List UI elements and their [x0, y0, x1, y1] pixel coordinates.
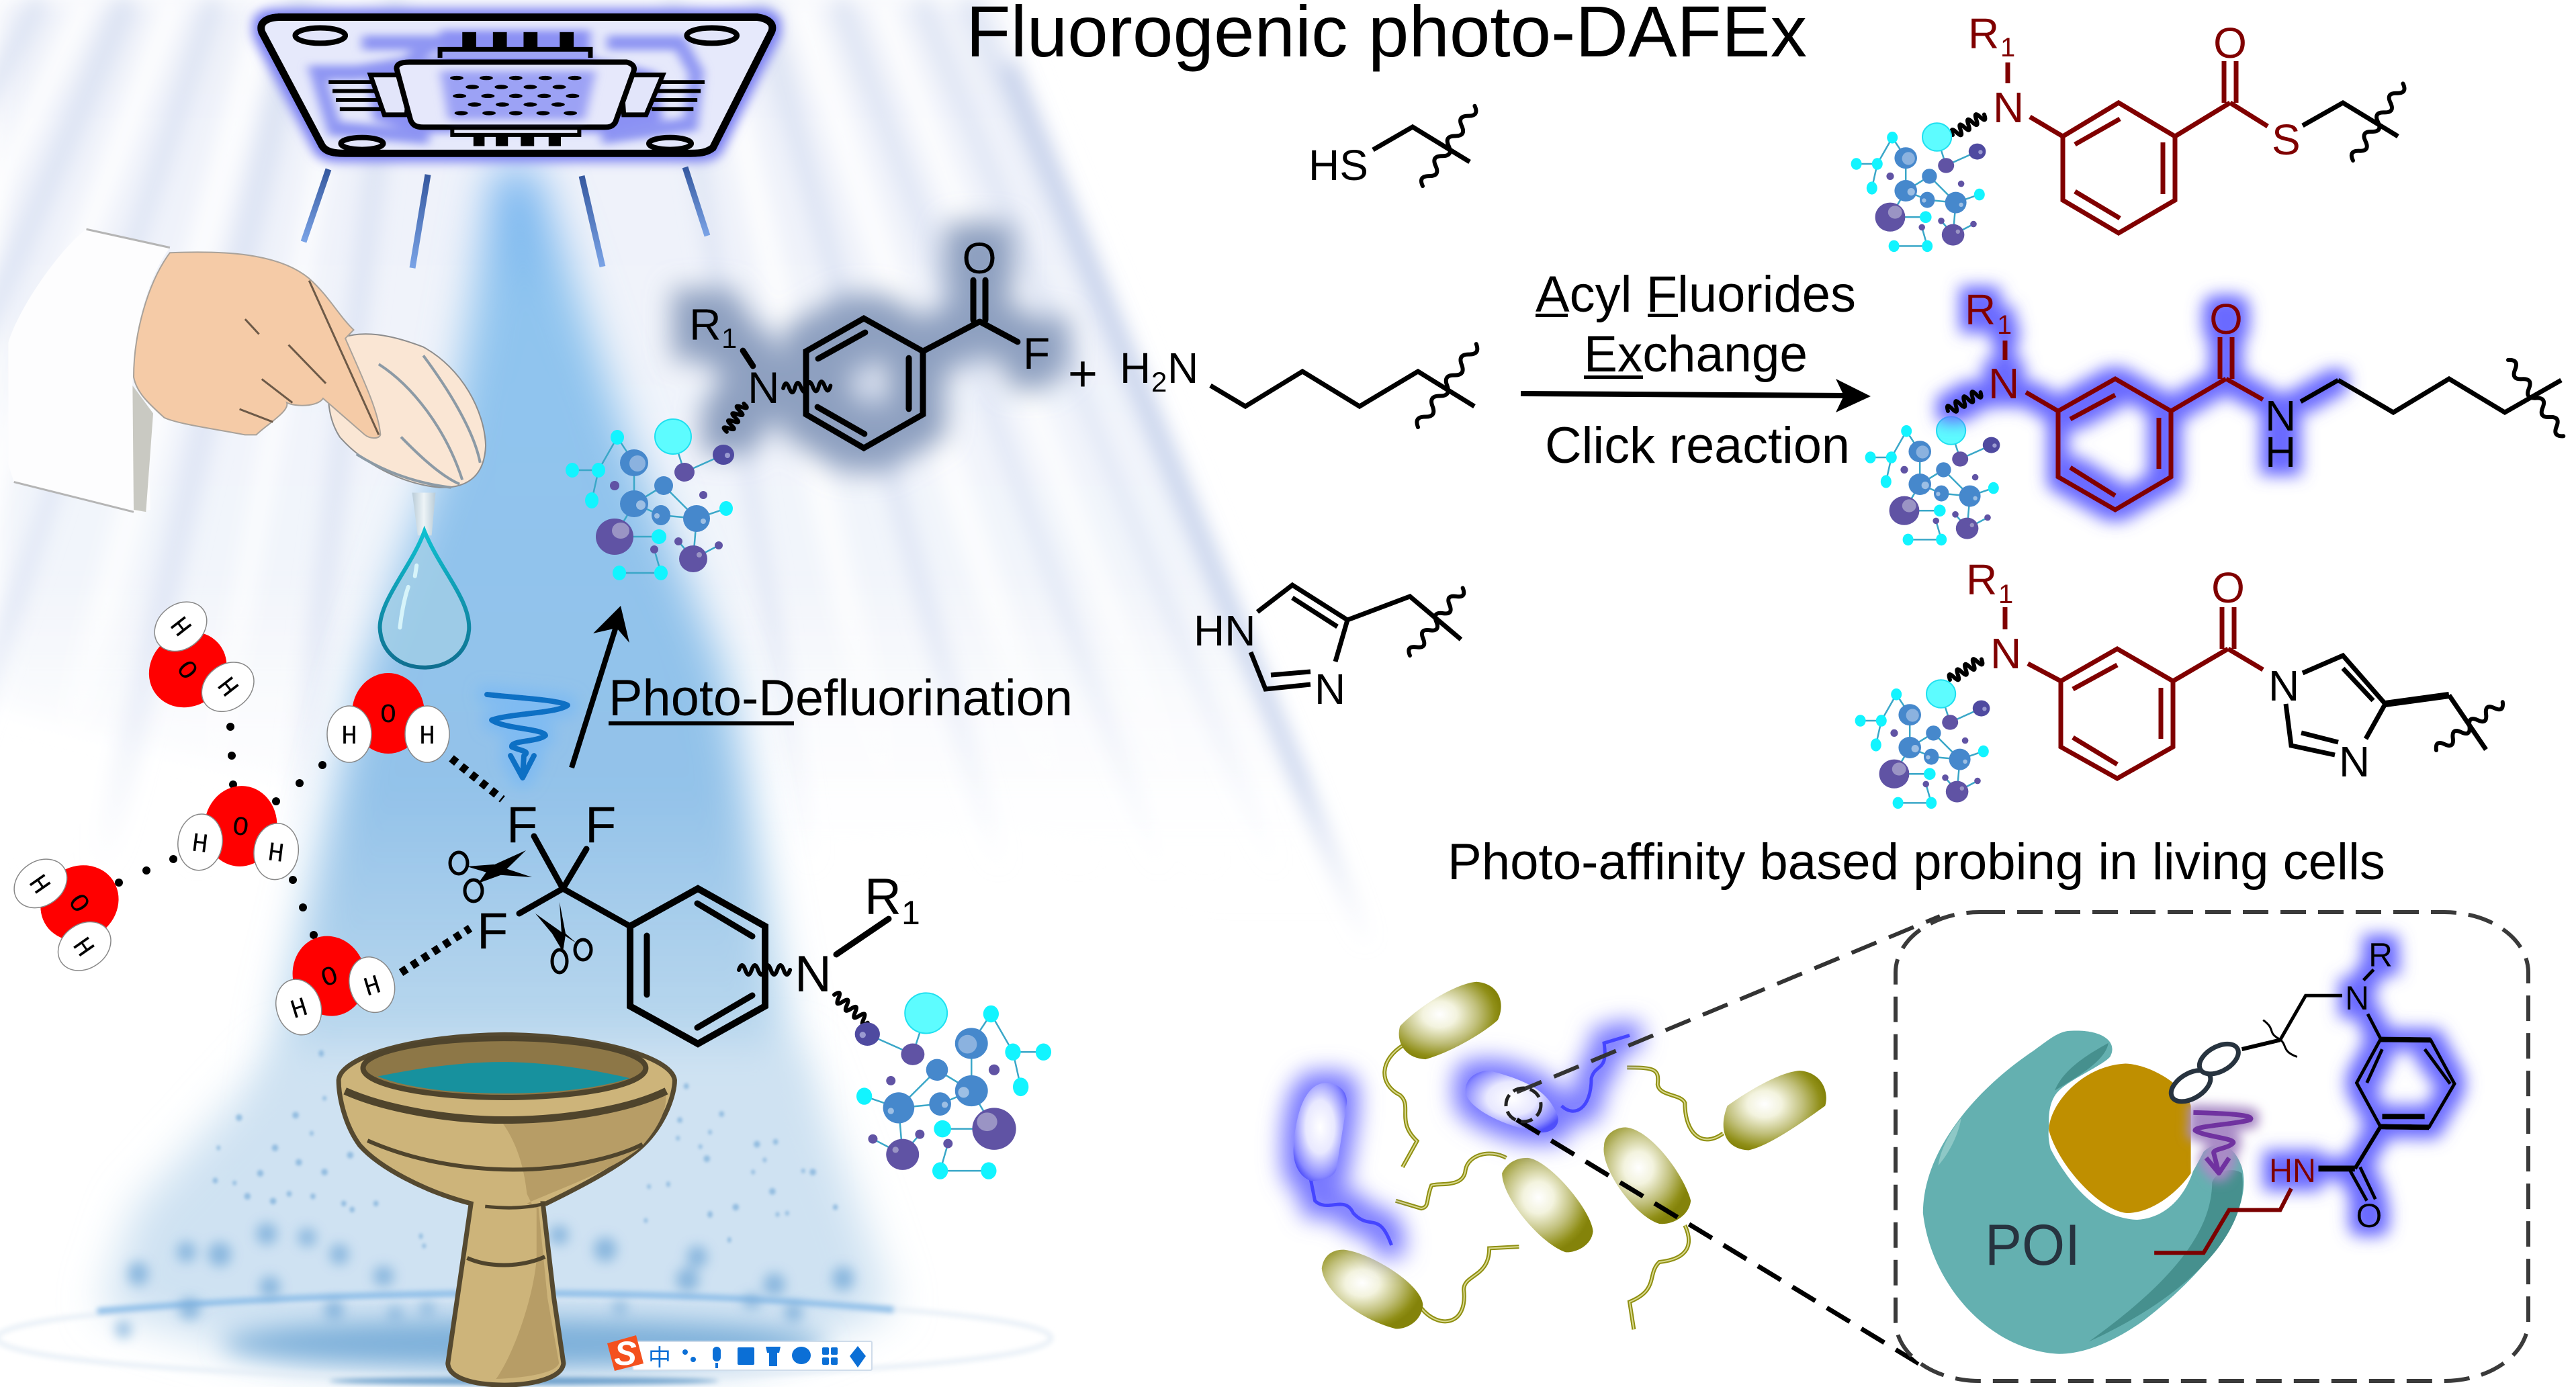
fluorescent labelled bacteria [1294, 1036, 1630, 1245]
molecule: acyl fluoride with dark glow [689, 233, 1050, 448]
water molecules with hydrogen-bond dots: H [166, 609, 200, 640]
molecule: trifluoromethyl aryl precursor: F [506, 797, 537, 854]
water molecules with hydrogen-bond dots: O [380, 701, 396, 731]
molecule: trifluoromethyl aryl precursor: F [477, 903, 508, 960]
molecule: acyl fluoride with dark glow: O [962, 233, 997, 283]
zoom callout lines and selection circle [1506, 916, 1940, 1366]
molecule: trifluoromethyl aryl precursor: R [864, 868, 901, 926]
input method toolbar [607, 1335, 872, 1372]
reagent: amine: N [1167, 344, 1198, 392]
background rays [0, 0, 1384, 954]
water molecules with hydrogen-bond dots: H [214, 670, 247, 701]
plus sign: + [1068, 345, 1098, 402]
probe blue glow segment: HN [2269, 1152, 2316, 1190]
water molecules with hydrogen-bond dots: O [230, 813, 251, 844]
reagent: thiol: HS [1308, 141, 1368, 189]
icon: chip lamp [261, 17, 772, 153]
reaction arrow with labels: Exchange [1584, 326, 1808, 383]
protein of interest [1923, 1030, 2244, 1354]
heading: photo-affinity probing: Photo-affinity based probing in living cells [1448, 834, 2385, 891]
water molecules with hydrogen-bond dots [5, 592, 502, 1040]
water molecules with hydrogen-bond dots: H [341, 722, 357, 752]
product: acyl imidazole [1855, 555, 2505, 809]
icon: scissors upper [450, 850, 532, 901]
reagent: imidazole: HN [1194, 607, 1255, 655]
product: thioester [1851, 9, 2407, 252]
icon: molecule cluster, lower probe [855, 993, 1051, 1179]
product: fluorescent amide with blue glow: 1 [1997, 310, 2012, 340]
lamp light bars [304, 167, 707, 268]
glowing stage mist [0, 1048, 1051, 1385]
product: acyl imidazole: N [2268, 662, 2299, 710]
icon: water drop [380, 531, 469, 668]
molecule: acyl fluoride with dark glow: R [689, 300, 721, 349]
reagent: imidazole [1194, 585, 1466, 713]
product: thioester: 1 [2000, 33, 2015, 62]
photo-defluorination label: Photo-Defluorination [609, 670, 1073, 727]
product: acyl imidazole: R [1966, 555, 1997, 604]
probe blue glow segment: O [2356, 1197, 2382, 1235]
reaction arrow with labels: Acyl Fluorides [1536, 266, 1856, 323]
probe blue glow segment: N [2345, 979, 2369, 1017]
molecule: acyl fluoride with dark glow: F [1023, 328, 1050, 378]
icon: molecule cluster, upper probe [566, 419, 734, 580]
panel: protein close-up [1896, 912, 2528, 1381]
molecule: acyl fluoride with dark glow: N [748, 363, 780, 412]
molecule: trifluoromethyl aryl precursor: 1 [901, 894, 920, 932]
water molecules with hydrogen-bond dots: H [65, 933, 99, 963]
product: acyl imidazole: N [2339, 737, 2370, 786]
bacteria panel [1322, 982, 1826, 1329]
purple wavy emission [2193, 1112, 2251, 1173]
water molecules with hydrogen-bond dots: H [266, 838, 285, 870]
reagent: amine: H [1120, 344, 1151, 392]
icon: blue wavy light arrow [487, 695, 568, 778]
water molecules with hydrogen-bond dots: O [318, 961, 342, 995]
product: fluorescent amide with blue glow: R [1965, 285, 1996, 334]
molecule: trifluoromethyl aryl precursor: N [795, 946, 832, 1003]
water molecules with hydrogen-bond dots: H [361, 971, 385, 1004]
product: fluorescent amide with blue glow: H [2265, 428, 2296, 476]
icon: grail fountain [339, 1034, 674, 1385]
water molecules with hydrogen-bond dots: O [60, 889, 95, 920]
product: fluorescent amide with blue glow [1865, 285, 2567, 545]
product: thioester: O [2213, 19, 2247, 67]
product: acyl imidazole: 1 [1998, 580, 2013, 609]
product: fluorescent amide with blue glow: N [1988, 359, 2019, 408]
probe linker [2154, 995, 2342, 1253]
reagent: thiol [1308, 103, 1478, 189]
input method toolbar: 中 [648, 1345, 671, 1371]
arrow: photo-defluorination [572, 606, 629, 768]
molecule: acyl fluoride with dark glow: 1 [721, 322, 737, 354]
POI label: POI [1985, 1213, 2080, 1278]
water molecules with hydrogen-bond dots: O [173, 652, 207, 684]
probe blue glow segment [2269, 936, 2454, 1235]
product: acyl imidazole: O [2211, 564, 2245, 612]
water molecules with hydrogen-bond dots: H [419, 722, 435, 752]
probe blue glow segment: R [2368, 936, 2393, 974]
icon: hand pressing dropper [8, 229, 486, 535]
input method toolbar: S [614, 1335, 637, 1372]
product: thioester: R [1968, 9, 1999, 58]
product: fluorescent amide with blue glow: O [2209, 295, 2243, 343]
reagent: imidazole: N [1315, 665, 1345, 713]
water molecules with hydrogen-bond dots: H [287, 993, 312, 1027]
reagent: amine [1120, 341, 1480, 430]
water molecules with hydrogen-bond dots: H [190, 830, 210, 861]
molecule: trifluoromethyl aryl precursor: F [585, 797, 616, 854]
product: acyl imidazole: N [1990, 629, 2021, 678]
central light beam [242, 168, 819, 1310]
reagent: amine: 2 [1151, 366, 1167, 398]
product: thioester: S [2272, 116, 2301, 164]
reaction arrow with labels: Click reaction [1545, 417, 1850, 474]
water molecules with hydrogen-bond dots: H [21, 870, 55, 901]
dashed inset frame [1896, 912, 2528, 1381]
reaction arrow with labels [1521, 266, 1871, 474]
icon: scissors lower [535, 902, 591, 973]
product: fluorescent amide with blue glow: N [2265, 392, 2296, 440]
product: thioester: N [1993, 83, 2024, 132]
molecule: trifluoromethyl aryl precursor [477, 797, 920, 1044]
